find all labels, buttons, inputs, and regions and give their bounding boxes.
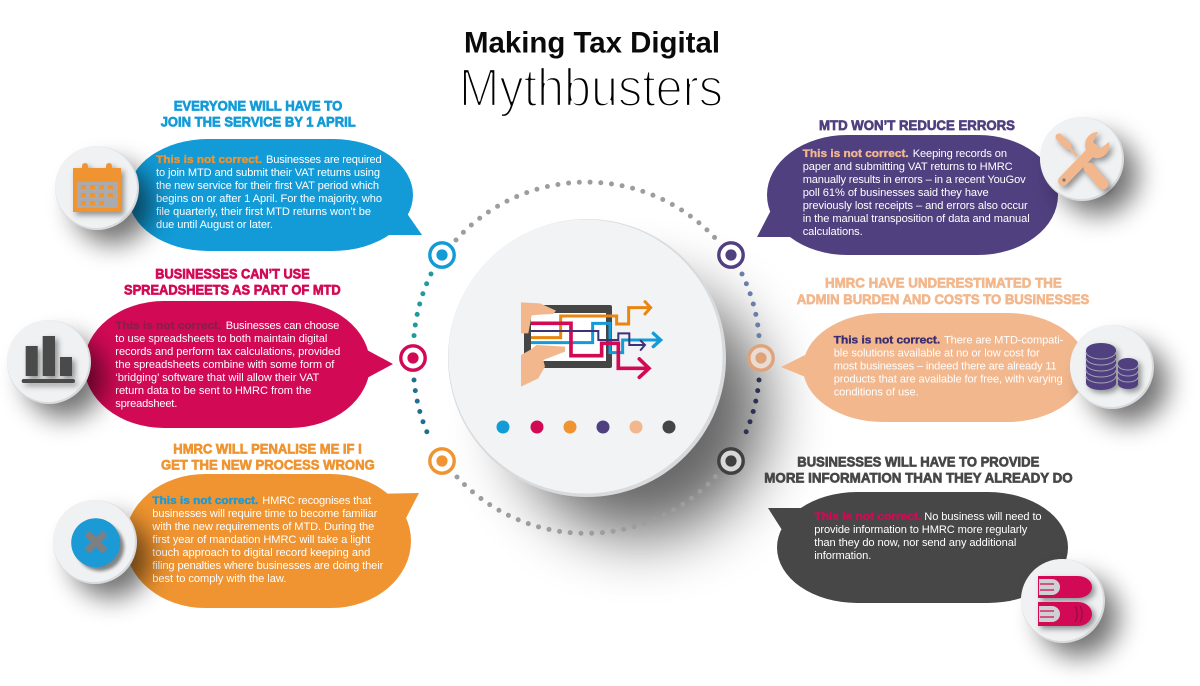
body text: with the new requirements of MTD. During the [151,521,374,533]
body text: This is not correct. [803,148,909,160]
body text: filing penalties where businesses are doing their [152,560,384,572]
heading: ADMIN BURDEN AND COSTS TO BUSINESSES [797,291,1089,307]
ring marker: peach [749,346,773,370]
body text [115,320,340,410]
body text: most businesses – indeed there are already 11 [834,361,1057,373]
body text: begins on or after 1 April. For the majority, who [156,193,382,205]
icon: calendar [55,146,153,244]
body text: to use spreadsheets to both maintain digital [115,333,327,345]
panel: MTD won't reduce errors [757,117,1138,255]
body text: manually results in errors – in a recent YouGov [803,174,1026,186]
body text [834,335,1064,399]
heading: MORE INFORMATION THAN THEY ALREADY DO [764,469,1073,485]
heading: HMRC WILL PENALISE ME IF I [173,440,362,456]
heading [764,453,1073,485]
body text: the new service for their first VAT period which [156,180,379,192]
body text: No business will need to [924,511,1042,523]
body text: ble solutions available at no or low cost for [834,348,1040,360]
panel: everyone will have to join [55,98,422,251]
body text: paper and submitting VAT returns to HMRC [803,161,1013,173]
body text: products that are available for free, with varying [834,374,1063,386]
ring marker: dark [719,449,743,473]
panel: HMRC have underestimated [781,275,1168,423]
body text [814,511,1042,562]
title: Making Tax Digital [464,26,720,60]
heading: BUSINESSES WILL HAVE TO PROVIDE [797,453,1039,469]
body text: best to comply with the law. [152,573,286,585]
heading: MTD WON’T REDUCE ERRORS [819,117,1015,133]
body text: information. [814,550,871,562]
heading: EVERYONE WILL HAVE TO [174,98,342,114]
heading [124,265,341,297]
body text: touch approach to digital record keeping and [152,547,370,559]
central circle drop shadow [515,286,765,536]
body text: This is not correct. [834,335,940,347]
body text: to join MTD and submit their VAT returns using [156,167,380,179]
heading: BUSINESSES CAN’T USE [155,265,310,281]
body text: Keeping records on [913,148,1007,160]
heading [161,440,375,472]
icon: tablet with hands and arrows [521,302,661,387]
panel: businesses can't use spreadsheets [7,265,393,428]
body text: return data to be sent to HMRC from the [115,385,311,397]
body text: HMRC recognises that [262,495,371,507]
body text: file quarterly, their first MTD returns won’t be [156,206,371,218]
body text: There are MTD-compati- [944,335,1064,347]
body text [156,154,382,231]
speech bubble [757,135,1058,255]
body text: calculations. [803,226,863,238]
body text: Businesses can choose [226,320,339,332]
icon: cross button [53,500,151,598]
body text: first year of mandation HMRC will take a light [152,534,370,546]
speech bubble [128,139,422,251]
body text: spreadsheet. [115,398,177,410]
title: Mythbusters [459,58,723,118]
body text: businesses will require time to become familiar [152,508,378,520]
body text: This is not correct. [115,320,221,332]
ring marker: orange [430,449,454,473]
heading [161,98,356,130]
icon: bar chart [7,320,105,418]
speech bubble [125,474,419,608]
body text: poll 61% of businesses said they have [803,187,989,199]
body text [803,148,1030,238]
body text: conditions of use. [834,387,919,399]
panel: businesses will have to provide more information [764,453,1119,657]
speech bubble [781,313,1087,422]
body text: provide information to HMRC more regularly [814,524,1028,536]
ring marker: crimson [401,346,425,370]
ring marker: purple [719,243,743,267]
central circle [448,219,726,497]
body text: ‘bridging’ software that will allow their VAT [115,372,320,384]
body text: previously lost receipts – and errors also occur [803,200,1028,212]
body text: Businesses are required [266,154,382,166]
heading: GET THE NEW PROCESS WRONG [161,456,375,472]
speech bubble [84,301,393,428]
heading [797,275,1089,307]
ring marker: blue [430,243,454,267]
heading: HMRC HAVE UNDERESTIMATED THE [825,275,1062,291]
title [459,26,723,118]
heading: SPREADSHEETS AS PART OF MTD [124,281,341,297]
body text: the spreadsheets combine with some form of [115,359,335,371]
body text: This is not correct. [156,154,262,166]
body text: due until August or later. [156,219,273,231]
body text: This is not correct. [152,495,258,507]
body text: This is not correct. [814,511,921,523]
icon: wrench and screwdriver [1040,117,1138,215]
icon: coin stacks [1070,325,1168,423]
panel: HMRC will penalise me [53,440,419,608]
body text [151,495,384,585]
colour dots [496,420,676,434]
dotted ring [414,182,759,533]
body text: in the manual transposition of data and manual [803,213,1030,225]
body text: than they do now, nor send any additional [814,537,1016,549]
body text: records and perform tax calculations, provided [115,346,340,358]
speech bubble [768,492,1068,603]
icon: books [1021,559,1119,657]
heading: JOIN THE SERVICE BY 1 APRIL [161,114,356,130]
